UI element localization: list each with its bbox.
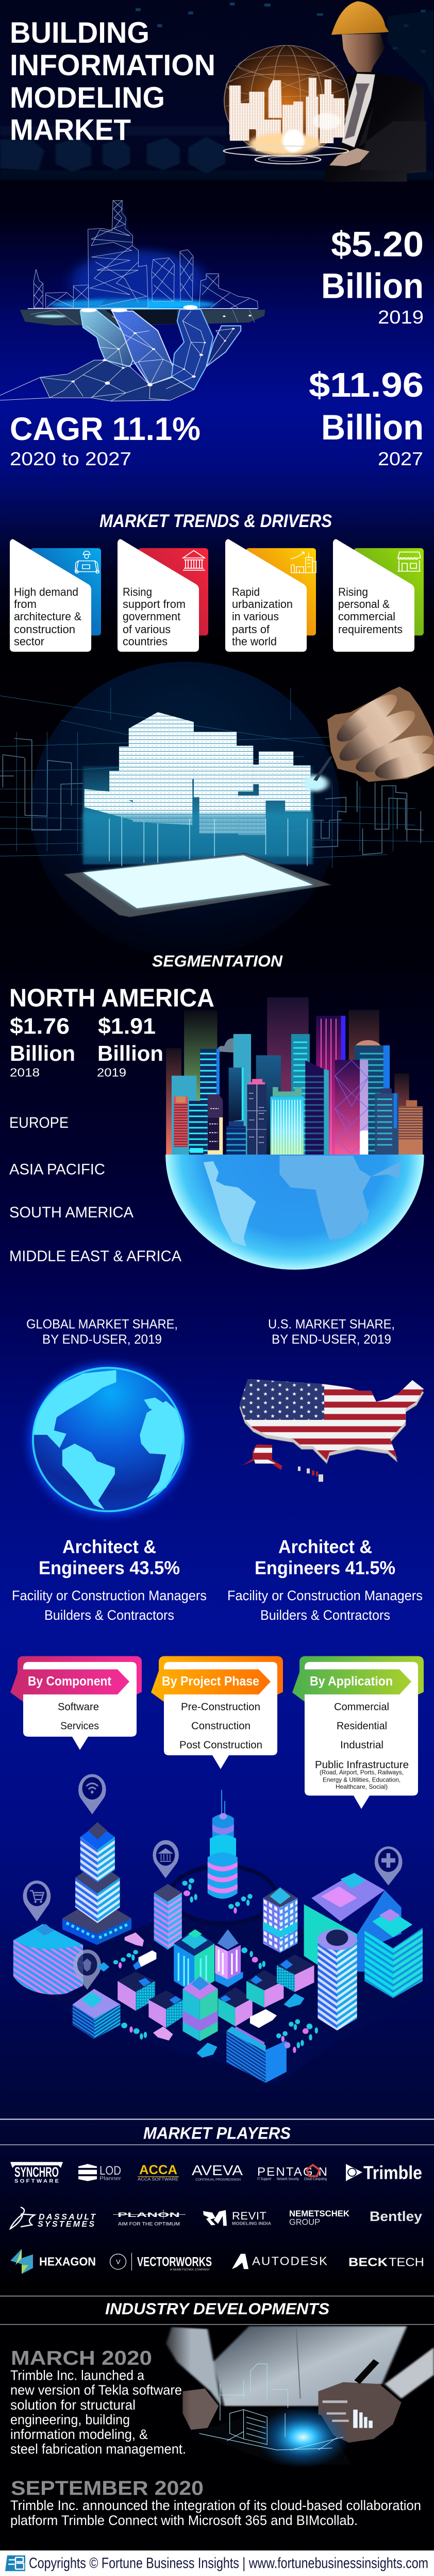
logo: Nemetschek: NEMETSCHEK — [289, 2209, 349, 2218]
shirt — [166, 2326, 434, 2406]
stat: global share — [12, 1536, 207, 1623]
palm — [40, 360, 194, 401]
continents — [33, 1370, 183, 1510]
text: of various — [123, 623, 171, 636]
logo: Synchro: SYNCHRO — [14, 2164, 59, 2180]
callout: by component: Services — [60, 1720, 99, 1732]
heading: U.S. market share: BY END-USER, 2019 — [272, 1333, 391, 1347]
text: urbanization — [232, 598, 293, 611]
logo: Dassault Systemes: SYSTEMES — [38, 2221, 95, 2229]
logo: Nemetschek — [289, 2209, 349, 2227]
half globe — [165, 1155, 424, 1269]
logo: AVEVA: CONTINUAL PROGRESSION — [195, 2178, 241, 2182]
stat: global share: Architect & — [62, 1536, 156, 1557]
icon: engineer with blueprint — [75, 551, 99, 573]
region: north america: 2018 — [10, 1066, 40, 1079]
stat: U.S. share: Architect & — [278, 1536, 372, 1557]
stat: 2019 value: Billion — [321, 266, 424, 306]
logo: Vectorworks: A NEMETSCHEK COMPANY — [170, 2268, 210, 2272]
text: construction — [14, 623, 75, 636]
region: north america: $1.76 — [10, 1013, 70, 1039]
wireframe city — [199, 2364, 343, 2450]
logo: LOD Planner — [78, 2164, 121, 2182]
logo: Vectorworks — [110, 2253, 212, 2272]
region list: SOUTH AMERICA — [9, 1205, 134, 1221]
face — [342, 33, 385, 72]
development: March 2020: information modeling, & — [10, 2427, 148, 2442]
callout: by application: Residential — [337, 1720, 387, 1732]
stat: 2019 value: $5.20 — [331, 224, 424, 264]
stat: U.S. share: Engineers 41.5% — [255, 1557, 395, 1578]
card: high demand — [10, 539, 101, 652]
pen glow — [303, 775, 328, 791]
card: rising requirements — [333, 539, 424, 652]
hard hat — [331, 2, 389, 35]
text: countries — [123, 635, 168, 648]
vertical light streaks — [109, 817, 307, 866]
text: commercial — [338, 610, 395, 623]
text — [14, 586, 81, 648]
text — [232, 586, 293, 648]
logo: Dassault Systemes — [10, 2207, 96, 2229]
heading: global market share: BY END-USER, 2019 — [42, 1333, 162, 1347]
text: Rising — [338, 586, 368, 598]
development: March 2020 — [10, 2347, 186, 2456]
logo: ACCA: ACCA SOFTWARE — [138, 2177, 178, 2182]
development: March 2020: engineering, building — [10, 2412, 130, 2427]
stat: 2027 value: Billion — [321, 408, 424, 447]
pink lattice tower — [335, 1060, 368, 1155]
mesh nodes — [72, 305, 252, 386]
dark circle backdrop — [30, 662, 341, 956]
development: March 2020: steel fabrication management. — [10, 2441, 186, 2456]
stat: 2027 value: 2027 — [378, 448, 423, 469]
logo: LOD Planner: Planner — [99, 2176, 121, 2182]
logo: Planon: PLANON — [118, 2211, 180, 2218]
region: north america: 2019 — [97, 1066, 126, 1079]
heading: global market share — [26, 1317, 178, 1347]
striped pink tower — [154, 1884, 182, 1950]
fingers — [330, 687, 434, 784]
icon: growing city — [291, 552, 316, 573]
grid lines — [0, 688, 434, 868]
logo: BeckTech: TECH — [389, 2256, 424, 2268]
fingers and thumb — [80, 310, 241, 389]
text: personal & — [338, 598, 390, 611]
logo: Bentley: Bentley — [370, 2208, 423, 2224]
title: BUILDING — [10, 16, 149, 49]
logo: Autodesk: AUTODESK — [252, 2255, 327, 2267]
stat: global share: Engineers 43.5% — [39, 1557, 180, 1578]
text: Rapid — [232, 586, 260, 598]
callout: by application: Public Infrastructure — [315, 1759, 409, 1771]
logo: Vectorworks: V — [116, 2259, 121, 2266]
stat: CAGR: 2020 to 2027 — [10, 448, 131, 469]
buildings — [85, 712, 311, 835]
back buildings — [166, 997, 409, 1155]
holographic rings — [224, 146, 348, 164]
icon: U.S. flag map — [237, 1375, 428, 1482]
text — [123, 586, 186, 648]
vehicles — [97, 1933, 305, 2058]
icon: glowing globe — [30, 1365, 187, 1514]
icon: government building — [183, 551, 205, 570]
logo: Synchro: SOFTWARE — [14, 2178, 59, 2184]
logo: BeckTech — [348, 2256, 424, 2268]
illustration: neon city on globe — [165, 997, 424, 1269]
light beam — [83, 766, 313, 865]
callout: by application: Industrial — [340, 1739, 383, 1751]
stat: CAGR: CAGR 11.1% — [10, 411, 201, 447]
logo: Planon: AIM FOR THE OPTIMUM — [118, 2222, 180, 2227]
logo: Nemetschek: GROUP — [289, 2217, 320, 2227]
development: March 2020: solution for structural — [10, 2397, 136, 2413]
bright glow and hand — [249, 113, 370, 166]
flag surface — [240, 1379, 424, 1460]
right complex — [304, 1873, 423, 1998]
callout: by component: Software — [58, 1701, 99, 1713]
stat: 2027 value: $11.96 — [309, 366, 424, 404]
card: rising support — [118, 539, 208, 652]
logo: ACCA: ACCA — [139, 2163, 177, 2177]
text: requirements — [338, 623, 403, 636]
logo: AVEVA: AVEVA — [192, 2163, 243, 2179]
text: architecture & — [14, 610, 81, 623]
pin: cart — [23, 1880, 51, 1922]
title: MARKET — [10, 114, 131, 146]
stat: global share: Facility or Construction Managers — [12, 1587, 207, 1603]
callout: by project phase: Pre-Construction — [181, 1701, 260, 1713]
heading: global market share: GLOBAL MARKET SHARE, — [26, 1317, 178, 1332]
logo: Revit — [203, 2210, 272, 2226]
lower left building — [73, 1989, 121, 2039]
shirt and tie — [342, 74, 375, 147]
bright platform top — [28, 308, 257, 309]
text: support from — [123, 598, 186, 611]
photo: hands with holographic blueprint — [155, 2325, 434, 2472]
blue glow — [50, 250, 216, 313]
building fade into beam — [83, 814, 311, 856]
lapel — [358, 105, 426, 170]
text: in various — [232, 610, 279, 623]
card: rapid urbanization — [225, 539, 316, 652]
heading: market players: MARKET PLAYERS — [143, 2124, 291, 2143]
houses — [118, 1954, 314, 2028]
ground roads — [8, 1865, 432, 2084]
hero: engineer holding holographic city — [224, 2, 426, 182]
lower right building — [226, 2026, 287, 2083]
region list: EUROPE — [9, 1114, 69, 1131]
pin: hospital — [375, 1846, 403, 1886]
logo: Planon — [113, 2210, 186, 2227]
callout: by application: (Road, Airport, Ports, Railways, — [320, 1769, 404, 1776]
logo: Hexagon: HEXAGON — [39, 2255, 96, 2268]
region: north america: Billion — [10, 1042, 75, 1066]
callout: by project phase: Construction — [191, 1720, 251, 1732]
hands — [182, 2359, 402, 2443]
window tower — [263, 1887, 297, 1953]
phone platform — [20, 310, 265, 326]
development: September 2020: platform Trimble Connect with Microsoft 365 and BIMcollab. — [10, 2512, 358, 2528]
hologram illustration: tablet projecting city — [0, 662, 434, 956]
logo: Pentagon: Network Security — [277, 2177, 299, 2181]
orange glow sphere — [224, 45, 349, 156]
logo: Trimble — [346, 2162, 422, 2183]
development: March 2020: new version of Tekla software — [10, 2382, 182, 2398]
icon: Fortune Business Insights logo — [5, 2555, 25, 2571]
heading: segmentation: SEGMENTATION — [152, 952, 283, 970]
logo: Revit: MODELING INDIA — [232, 2221, 272, 2226]
callout: by project phase: By Project Phase — [162, 1674, 259, 1689]
center tower — [208, 1790, 238, 1899]
mid buildings — [172, 1034, 390, 1156]
hand base — [327, 687, 434, 782]
region list: ASIA PACIFIC — [9, 1161, 105, 1178]
region: north america: NORTH AMERICA — [9, 983, 214, 1012]
logos: market players — [10, 2162, 424, 2274]
logo: Revit: REVIT — [232, 2210, 266, 2222]
title: INFORMATION — [10, 49, 215, 82]
tablet — [194, 2408, 352, 2465]
stars — [242, 1380, 324, 1420]
region list: MIDDLE EAST & AFRICA — [9, 1248, 182, 1265]
heading: market trends & drivers: MARKET TRENDS & DRIVERS — [99, 511, 332, 531]
logo: LOD Planner: LOD — [99, 2164, 121, 2178]
logo: Synchro — [10, 2162, 63, 2184]
logo: Trimble: Trimble — [363, 2162, 422, 2183]
front buildings — [174, 1079, 423, 1155]
isometric smart city — [8, 1774, 432, 2084]
mesh lines — [0, 311, 233, 401]
hand with stylus — [313, 687, 434, 784]
wireframe skyline — [34, 200, 258, 309]
callout: by component — [10, 1656, 142, 1750]
polygon hand holding wireframe city — [0, 200, 265, 401]
text: Rising — [123, 586, 152, 598]
holographic blue glow — [256, 2406, 350, 2468]
callout: by project phase — [151, 1656, 283, 1769]
stat: U.S. share: Builders & Contractors — [260, 1607, 390, 1623]
circuit lines — [0, 738, 424, 855]
title — [10, 16, 215, 146]
stat: 2019 value — [321, 224, 424, 328]
icon: store — [397, 552, 421, 571]
logo: Pentagon: Cloud Computing — [304, 2177, 327, 2181]
center teal building — [174, 1929, 214, 1993]
heading: U.S. market share — [268, 1317, 395, 1347]
logo: Pentagon: IT Support — [257, 2177, 272, 2181]
Hawaii — [298, 1467, 323, 1482]
title: MODELING — [10, 81, 165, 114]
region: north america: Billion — [97, 1042, 163, 1066]
curved left building — [13, 1924, 83, 1994]
map extrusion — [240, 1383, 424, 1464]
chart hologram — [323, 2400, 373, 2428]
continents — [279, 1156, 402, 1240]
region list — [9, 1114, 182, 1265]
text: sector — [14, 635, 44, 648]
callout: by application: Healthcare, Social) — [336, 1783, 388, 1790]
stat: global share: Builders & Contractors — [44, 1607, 174, 1623]
logo: Hexagon — [10, 2249, 96, 2274]
left fade — [155, 2325, 191, 2472]
stat: 2019 value: 2019 — [378, 307, 424, 328]
pin: wifi — [78, 1774, 106, 1815]
striped tower left — [62, 1822, 131, 1945]
logo: Vectorworks: VECTORWORKS — [137, 2255, 212, 2269]
text: government — [123, 610, 181, 623]
callout: by application — [292, 1656, 424, 1809]
stat: CAGR — [10, 411, 201, 469]
callout: by application: By Application — [310, 1674, 393, 1689]
development: September 2020: SEPTEMBER 2020 — [11, 2478, 204, 2499]
stat: 2027 value — [309, 366, 424, 469]
tall striped tower — [318, 1929, 357, 2030]
stat: U.S. share — [227, 1536, 423, 1623]
pyramid tower — [215, 1929, 243, 1987]
tablet screen — [83, 855, 313, 908]
region: north america: $1.91 — [98, 1013, 156, 1039]
pin: bank — [153, 1840, 179, 1878]
city inside sphere — [229, 78, 345, 150]
suit — [324, 72, 426, 182]
callout: by application: Energy & Utilities, Education, — [323, 1776, 400, 1783]
logo: BeckTech: BECK — [348, 2256, 388, 2268]
development: September 2020 — [10, 2478, 421, 2528]
heading: U.S. market share: U.S. MARKET SHARE, — [268, 1317, 395, 1332]
trees — [113, 1878, 318, 2053]
text: parts of — [232, 623, 270, 636]
footer — [0, 2550, 434, 2576]
text: High demand — [14, 586, 78, 598]
text: from — [14, 598, 37, 611]
tablet — [64, 853, 331, 917]
text: the world — [232, 635, 277, 648]
heading: industry developments: INDUSTRY DEVELOPMENTS — [105, 2300, 330, 2318]
development: March 2020: MARCH 2020 — [11, 2347, 152, 2369]
logo: Autodesk — [232, 2254, 327, 2269]
stacked center tower — [182, 1976, 218, 2041]
callout: by component: By Component — [28, 1674, 111, 1689]
region: north america — [9, 983, 214, 1079]
pin: police — [73, 1950, 101, 1990]
logo: Pentagon: PENTAG N — [257, 2165, 327, 2178]
development: March 2020: Trimble Inc. launched a — [10, 2367, 145, 2383]
callout: by project phase: Post Construction — [179, 1739, 262, 1751]
callout: by application: Commercial — [334, 1701, 389, 1713]
Alaska — [242, 1445, 282, 1470]
logo: Dassault Systemes: DASSAULT — [39, 2213, 96, 2222]
text — [338, 586, 403, 636]
